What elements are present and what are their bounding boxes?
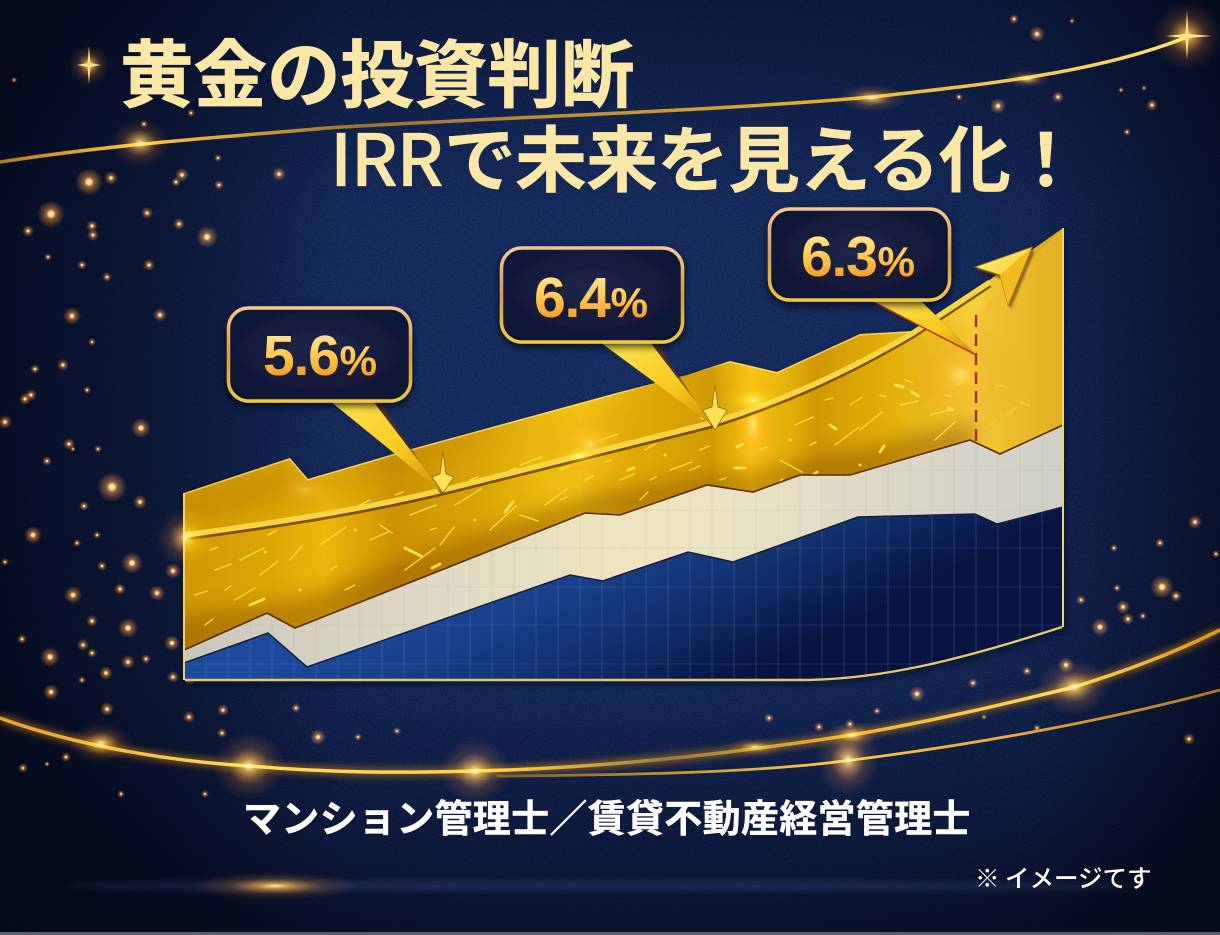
gold arc: top sweep	[0, 37, 1187, 167]
chart shadow	[186, 232, 1065, 684]
dashed marker	[975, 315, 977, 442]
callout: 6.4%	[502, 248, 727, 430]
icon: star flare top left	[69, 45, 109, 85]
title: で未来を見える化！	[444, 102, 1081, 207]
axis frame	[185, 627, 1062, 680]
callout: 5.6%: 5.6%	[263, 324, 377, 388]
callout: 5.6%	[228, 308, 454, 493]
gold flecks	[195, 380, 1030, 625]
blue area	[184, 500, 1063, 680]
note: ※ イメージてす	[975, 860, 1152, 895]
icon: star flare top right	[1153, 2, 1220, 70]
cream area	[184, 420, 1063, 680]
callout: 6.3%: 6.3%	[801, 225, 915, 289]
gold arcs: bottom sweep	[0, 630, 1220, 803]
bottom band shading	[185, 414, 982, 648]
horizontal light flare	[60, 872, 1140, 900]
title: IRR	[330, 102, 442, 207]
callout: 6.4%: 6.4%	[534, 266, 648, 330]
subtitle: マンション管理士／賃貸不動産経営管理士	[243, 788, 971, 843]
title	[120, 17, 1081, 207]
callout: 6.3%	[770, 209, 976, 355]
trend line arrow	[156, 247, 1034, 568]
gold area	[150, 228, 1063, 680]
title: 黄金の投資判断	[120, 17, 634, 123]
area chart	[150, 228, 1065, 684]
